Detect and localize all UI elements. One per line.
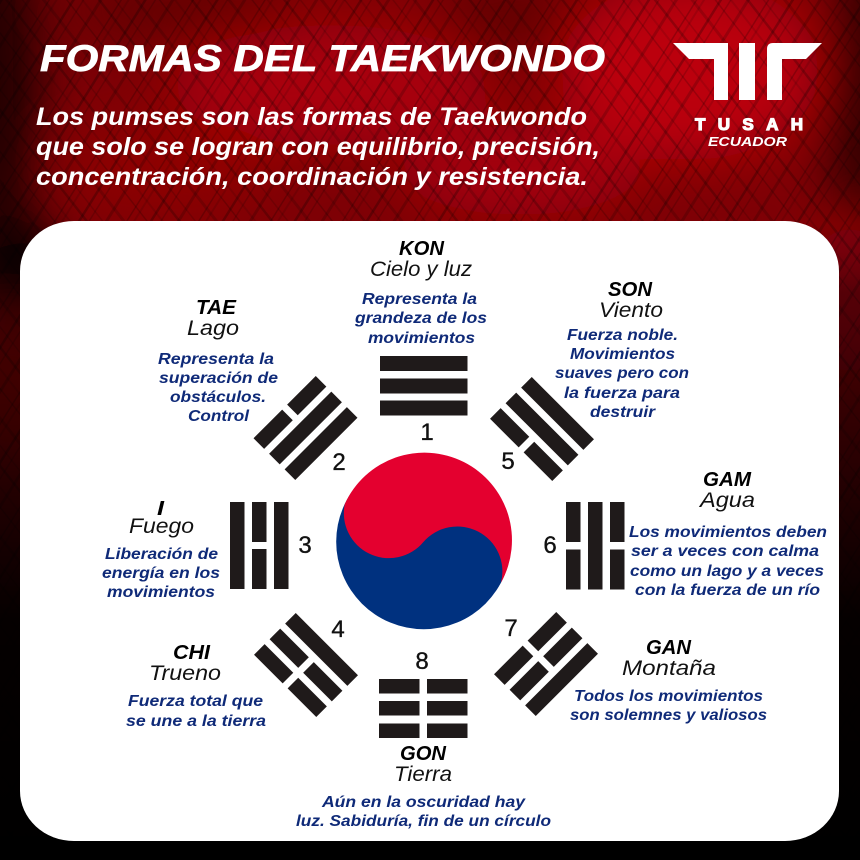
label: CHI: se une a la tierra	[126, 713, 266, 730]
label: GAN: son solemnes y valiosos	[570, 707, 767, 724]
label: GAM: GAM	[703, 469, 752, 491]
label: GAM: con la fuerza de un río	[635, 582, 820, 599]
trigram 6: GAM	[566, 502, 624, 590]
label: TAE: Lago	[187, 317, 239, 340]
logo wordmark: TUSAH	[695, 115, 803, 134]
label: GAN	[570, 637, 767, 724]
title: FORMAS DEL TAEKWONDO	[40, 38, 605, 79]
label: SON	[555, 279, 689, 421]
label: GON: Tierra	[394, 763, 452, 786]
label: I: I	[157, 498, 165, 520]
label: GAM: ser a veces con calma	[631, 543, 819, 560]
number 5: 5	[501, 448, 515, 475]
trigram 4: CHI	[254, 613, 358, 717]
label: I: Liberación de	[105, 546, 218, 563]
label: I: Fuego	[129, 515, 194, 538]
label: GAM	[629, 469, 827, 599]
label: GON: Aún en la oscuridad hay	[321, 794, 526, 811]
label: TAE: Representa la	[158, 351, 274, 368]
label: KON: grandeza de los	[354, 310, 487, 327]
label: KON	[354, 238, 487, 347]
label: GAM: Agua	[698, 489, 755, 512]
label: GAM: Los movimientos deben	[629, 524, 827, 541]
number 6: 6	[543, 532, 557, 559]
label: KON: KON	[399, 238, 445, 260]
label: TAE: superación de	[159, 370, 278, 387]
number 2: 2	[332, 449, 346, 476]
trigram 7: GAN	[494, 612, 598, 716]
label: SON: SON	[608, 279, 653, 301]
label: SON: la fuerza para	[564, 385, 680, 402]
label: SON: Fuerza noble.	[567, 327, 678, 344]
label: SON: suaves pero con	[555, 365, 689, 382]
number 3: 3	[298, 532, 312, 559]
white content panel	[20, 221, 839, 841]
label: SON: Movimientos	[570, 346, 675, 363]
label: KON: Cielo y luz	[370, 258, 473, 281]
label: TAE: Control	[188, 408, 250, 425]
label: GAN: Todos los movimientos	[574, 688, 763, 705]
label: CHI: CHI	[173, 642, 210, 664]
label: SON: destruir	[590, 404, 656, 421]
number 1: 1	[420, 419, 434, 446]
number 4: 4	[331, 616, 345, 643]
trigram 1: KON	[380, 356, 468, 416]
label: GON: GON	[400, 743, 447, 765]
trigram 3: I	[230, 502, 288, 589]
label: CHI: Fuerza total que	[128, 693, 263, 710]
trigram 5: SON	[490, 377, 594, 481]
label: I	[102, 498, 220, 601]
intro text: concentración, coordinación y resistencia.	[36, 163, 588, 191]
trigram 8: GON	[379, 679, 468, 738]
taegeuk circle	[336, 453, 512, 629]
logo country: ECUADOR	[708, 135, 787, 149]
label: I: energía en los	[102, 565, 220, 582]
number 8: 8	[415, 648, 429, 675]
label: TAE	[158, 297, 278, 425]
intro text	[36, 103, 600, 191]
label: SON: Viento	[599, 299, 663, 322]
label: KON: movimientos	[368, 330, 475, 347]
label: GAN: GAN	[646, 637, 692, 659]
label: TAE: TAE	[196, 297, 237, 319]
label: CHI: Trueno	[149, 662, 221, 685]
logo: Tusah Ecuador	[673, 43, 822, 149]
label: KON: Representa la	[362, 291, 477, 308]
intro text: que solo se logran con equilibrio, precisión,	[36, 133, 600, 161]
logo mark	[673, 43, 822, 100]
label: I: movimientos	[107, 584, 215, 601]
label: GAN: Montaña	[622, 657, 716, 680]
label: GON: luz. Sabiduría, fin de un círculo	[296, 813, 551, 830]
label: GAM: como un lago y a veces	[630, 563, 824, 580]
trigram 2: TAE	[254, 376, 357, 480]
label: GON	[296, 743, 551, 830]
label: CHI	[126, 642, 266, 730]
label: TAE: obstáculos.	[170, 389, 266, 406]
number 7: 7	[504, 615, 518, 642]
intro text: Los pumses son las formas de Taekwondo	[36, 103, 587, 131]
